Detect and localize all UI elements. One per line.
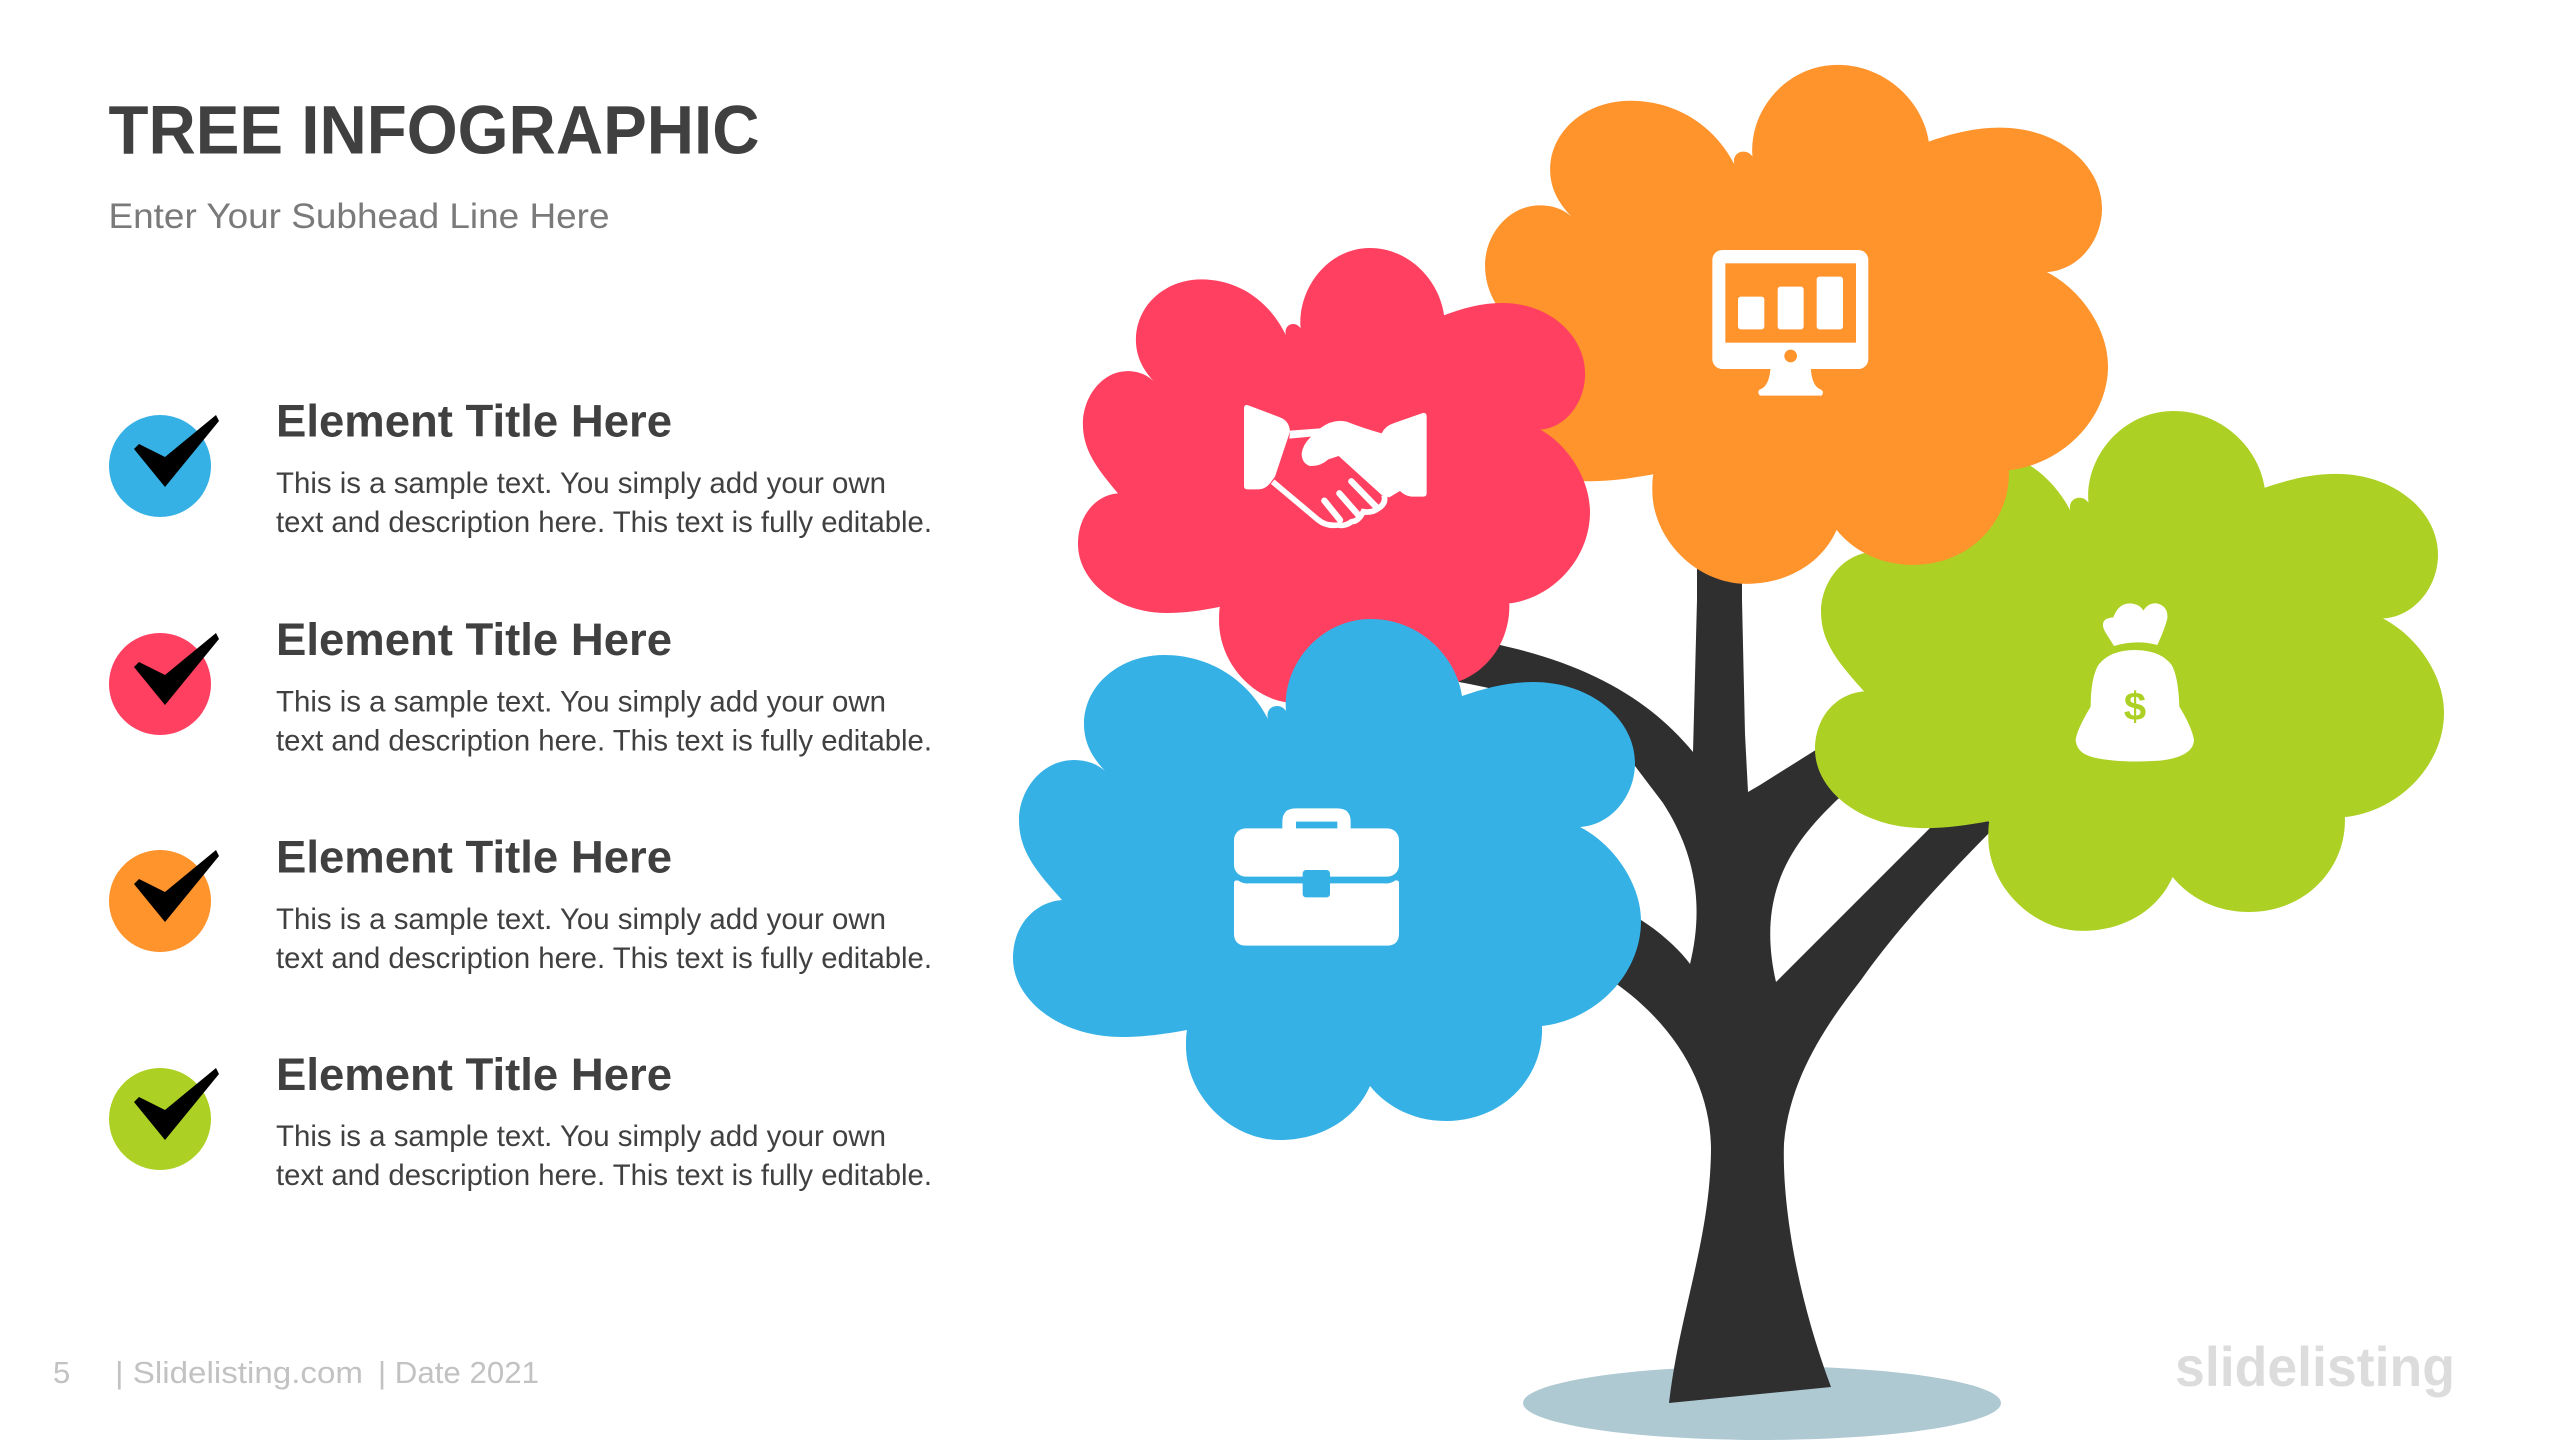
red foliage cloud <box>1078 248 1590 703</box>
item description: This is a sample text. You simply add your own <box>276 903 886 936</box>
ground shadow <box>1523 1366 2001 1440</box>
item description <box>276 903 932 975</box>
footer: 5 <box>53 1355 70 1390</box>
icon: briefcase <box>1234 808 1399 946</box>
tree trunk and branches <box>1450 560 1995 1403</box>
blue foliage cloud <box>1013 619 1641 1140</box>
item description: text and description here. This text is fully editable. <box>276 724 932 758</box>
check badge: red <box>109 633 219 735</box>
check badge: orange <box>109 850 219 952</box>
list item 2: red <box>109 614 932 758</box>
item heading: Element Title Here <box>276 614 672 665</box>
item description <box>276 467 932 539</box>
green foliage cloud <box>1815 411 2444 931</box>
item heading: Element Title Here <box>276 396 672 446</box>
footer <box>53 1355 539 1390</box>
item heading: Element Title Here <box>276 832 672 882</box>
item description <box>276 686 932 758</box>
check badge: blue <box>109 415 219 517</box>
item description: This is a sample text. You simply add your own <box>276 467 886 500</box>
item description: This is a sample text. You simply add your own <box>276 1120 886 1153</box>
check badge: green <box>109 1068 219 1170</box>
footer: | Date 2021 <box>378 1355 539 1390</box>
item description <box>276 1120 932 1192</box>
item description: text and description here. This text is fully editable. <box>276 942 932 975</box>
item heading: Element Title Here <box>276 1049 672 1100</box>
list item 1: blue <box>109 396 932 539</box>
icon: money bag: $ <box>2124 685 2146 729</box>
footer: | Slidelisting.com <box>115 1355 363 1390</box>
list item 4: green <box>109 1049 932 1192</box>
item description: text and description here. This text is fully editable. <box>276 506 932 539</box>
orange foliage cloud <box>1479 65 2108 584</box>
item description: This is a sample text. You simply add your own <box>276 686 886 718</box>
icon: handshake <box>1244 405 1427 525</box>
item description: text and description here. This text is fully editable. <box>276 1159 932 1192</box>
icon: money bag <box>2076 603 2194 761</box>
list item 3: orange <box>109 832 932 975</box>
icon: monitor with bar chart <box>1712 250 1868 396</box>
subhead: Enter Your Subhead Line Here <box>108 197 610 236</box>
brand watermark: slidelisting <box>2175 1335 2455 1398</box>
title: TREE INFOGRAPHIC <box>108 92 760 168</box>
